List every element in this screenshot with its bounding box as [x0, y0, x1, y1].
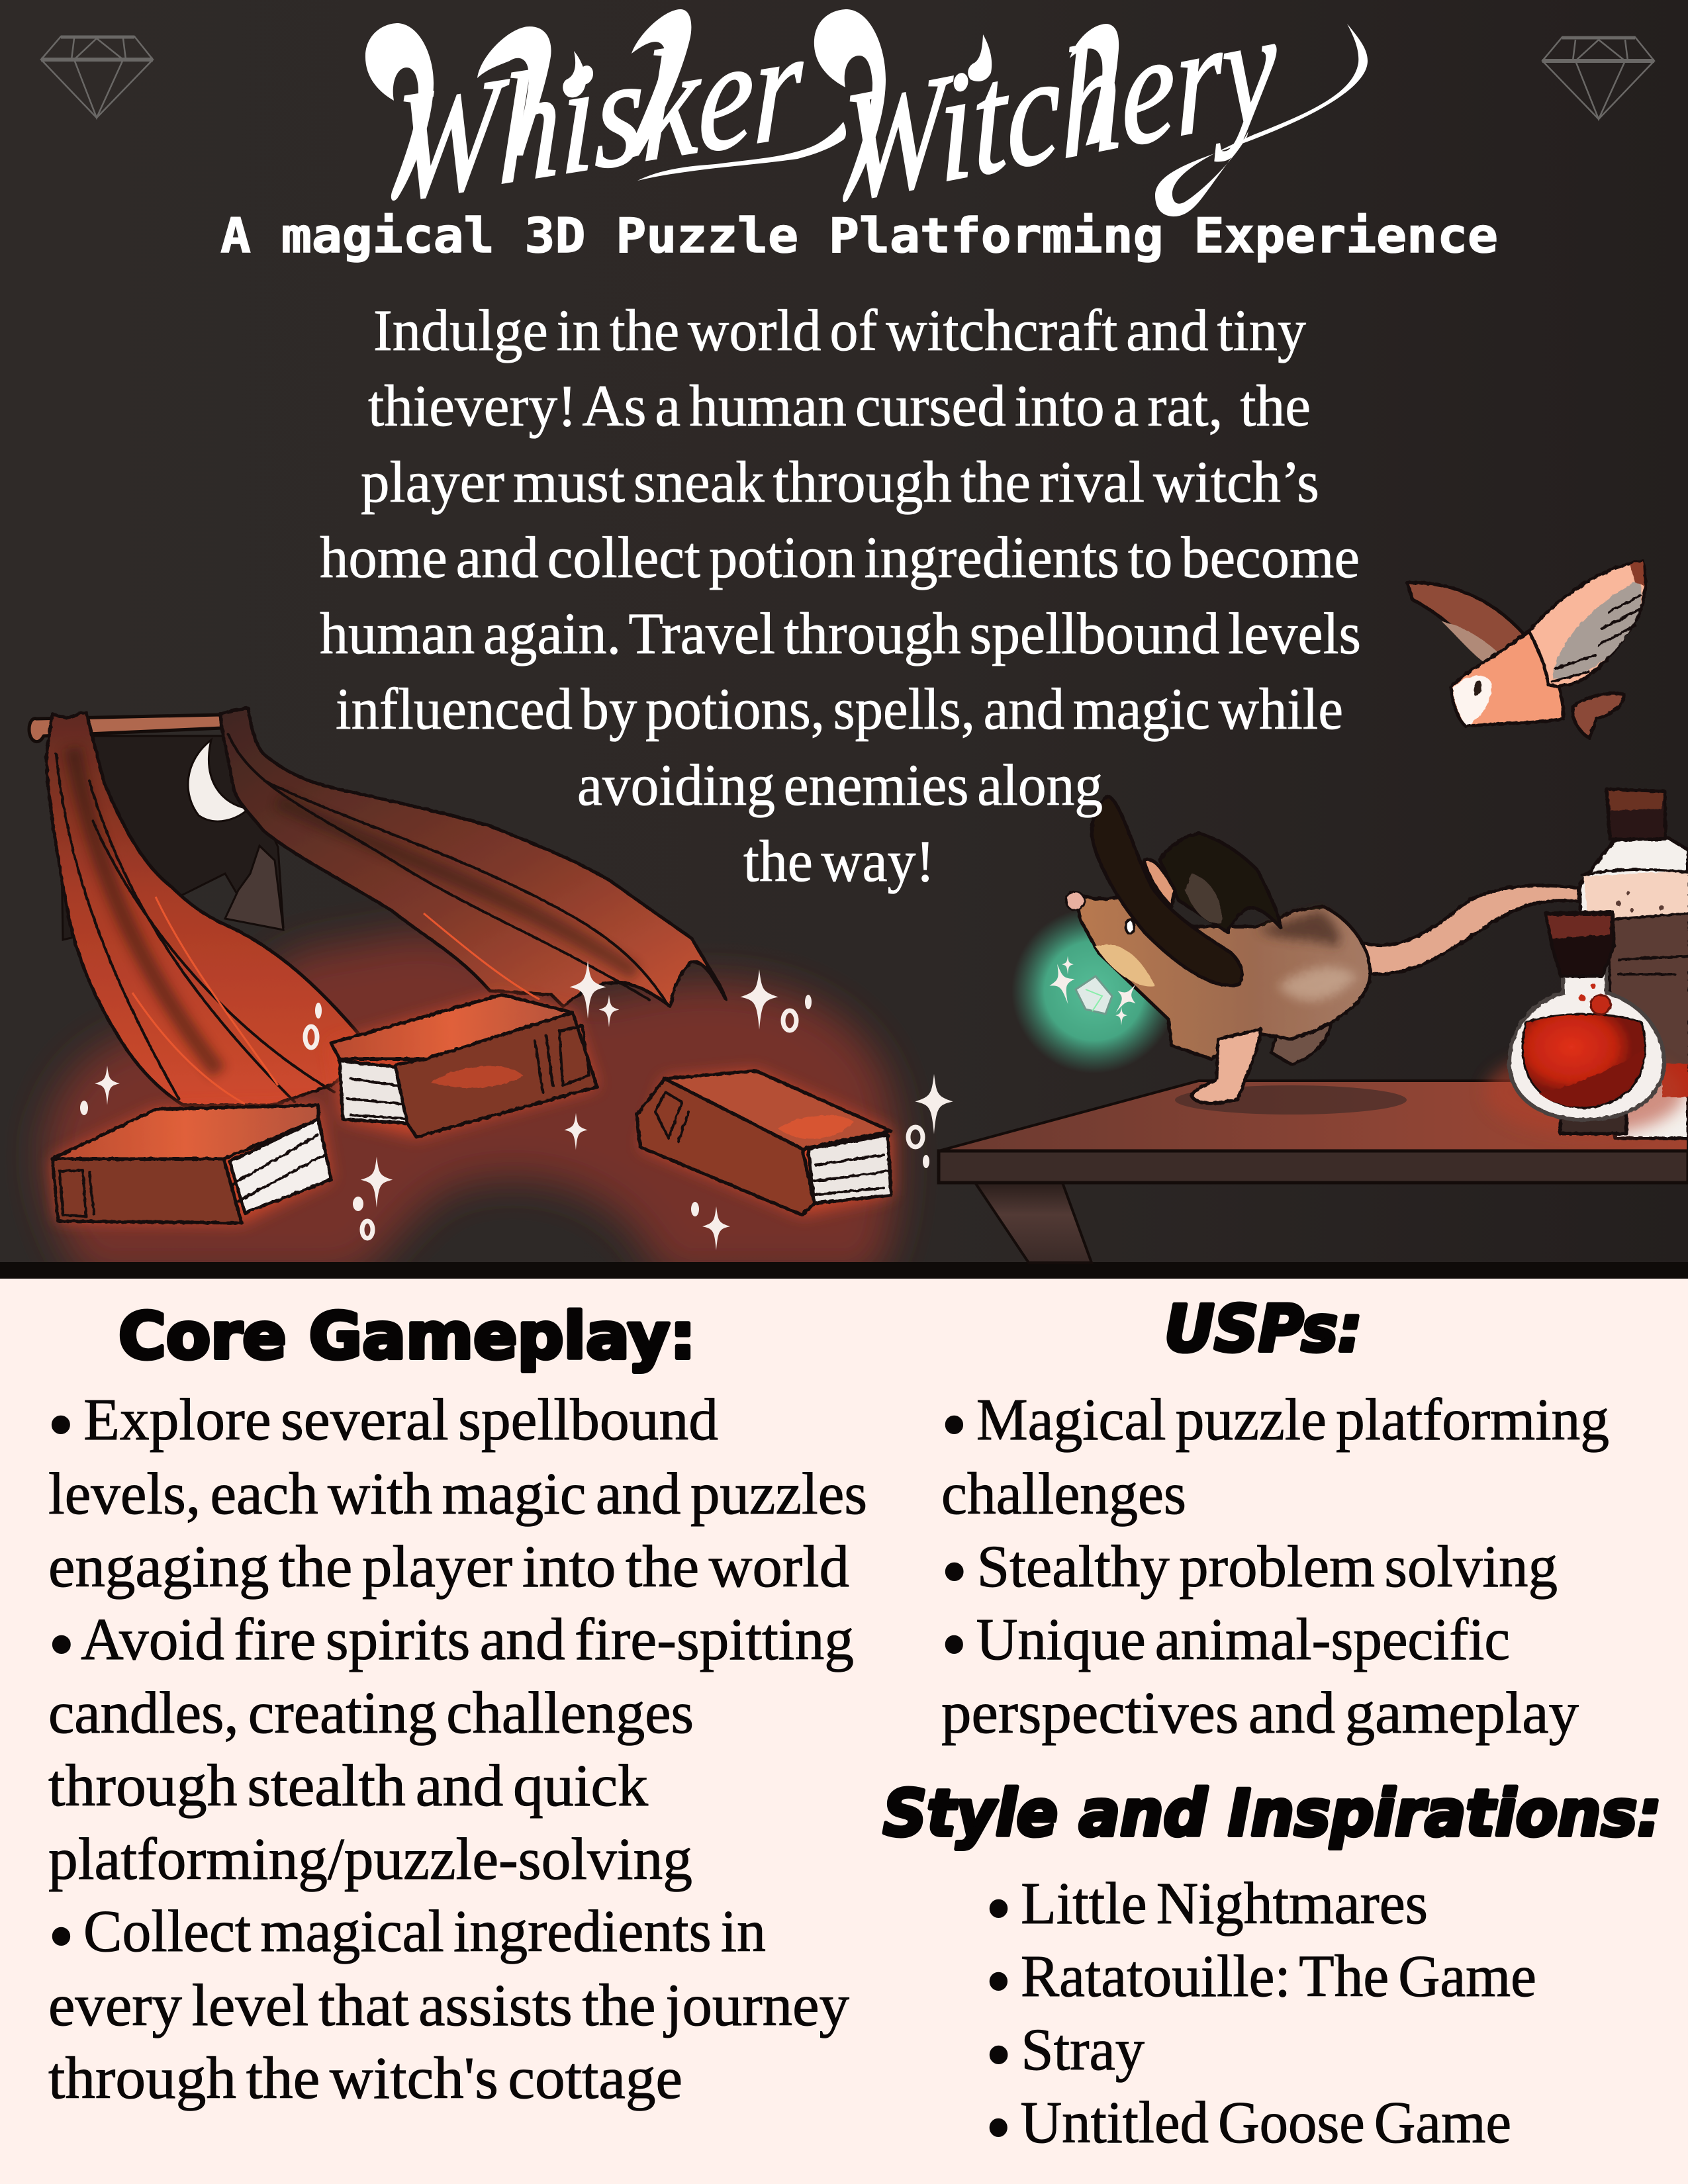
illustration: red glow behind books	[45, 933, 898, 1277]
rat fur highlight	[1278, 967, 1357, 1001]
text block: intro paragraph: Indulge in the world of witchcraft and tiny	[373, 298, 1306, 363]
illustration: front red potion flask	[1485, 912, 1684, 1135]
text block: inspirations list: •	[986, 2013, 1011, 2097]
text block: intro paragraph	[320, 298, 1361, 894]
text block: core gameplay bullets: •	[48, 1602, 75, 1686]
text block: USP bullets: Stealthy problem solving	[967, 1534, 1558, 1600]
gem	[1076, 976, 1112, 1014]
text block: core gameplay bullets: platforming/puzzle-solving	[48, 1827, 692, 1892]
text block: USP bullets: Magical puzzle platforming	[967, 1387, 1609, 1453]
right curtain fold shading	[278, 801, 635, 973]
panel: cream lower section	[0, 1279, 1688, 2184]
rat nose	[1066, 891, 1084, 910]
text block: USP bullets: •	[941, 1529, 967, 1614]
text block: USP bullets	[941, 1383, 1609, 1746]
illustration: curtains, window and moon	[29, 708, 726, 1105]
left curtain	[46, 712, 374, 1105]
illustration: book rim glow	[52, 995, 891, 1223]
text block: core gameplay bullets: Explore several spellbound	[74, 1387, 718, 1453]
owl face	[1453, 676, 1491, 725]
text block: intro paragraph: the way!	[743, 829, 935, 894]
gem sparkles	[1045, 956, 1145, 1025]
illustration: back potion bottle	[1580, 789, 1688, 1138]
panel: dark hero background	[0, 0, 1688, 1262]
window panel	[60, 736, 283, 940]
icon: right diamond outline	[1542, 37, 1654, 119]
rat ear	[1144, 859, 1175, 907]
text block: core gameplay bullets: through stealth and quick	[48, 1753, 648, 1819]
text block: inspirations list: Stray	[1011, 2017, 1145, 2083]
text block: USP bullets: challenges	[941, 1461, 1186, 1527]
text block: core gameplay bullets: every level that assists the journey	[48, 1973, 849, 2038]
text block: core gameplay bullets	[48, 1383, 867, 2111]
illustration: bottom-left book	[52, 1105, 331, 1223]
text block: core gameplay bullets: •	[48, 1894, 74, 1978]
text block: intro paragraph: influenced by potions, spells, and magic while	[336, 677, 1343, 742]
text block: intro paragraph: home and collect potion ingredients to become	[320, 525, 1360, 590]
icon: left diamond outline	[41, 36, 153, 118]
right curtain	[220, 708, 726, 1007]
text block: intro paragraph: human again. Travel through spellbound levels	[320, 602, 1361, 666]
text block: inspirations list: •	[986, 1939, 1011, 2023]
rat snout highlight	[1096, 945, 1155, 987]
text block: inspirations list: •	[986, 1866, 1011, 1950]
heading: USPs: USPs:	[1164, 1292, 1362, 1366]
text block: USP bullets: •	[941, 1383, 967, 1467]
text block: inspirations list: Ratatouille: The Game	[1011, 1944, 1536, 2009]
subtitle: A magical 3D Puzzle Platforming Experience	[220, 208, 1498, 263]
hat crown	[1160, 833, 1281, 933]
text block: inspirations list: •	[986, 2085, 1011, 2169]
owl tail	[1573, 694, 1624, 738]
rat back leg	[1271, 1016, 1331, 1064]
text block: core gameplay bullets: Collect magical ingredients in	[74, 1899, 766, 1964]
text block: intro paragraph: thievery! As a human cursed into a rat, the	[368, 374, 1311, 439]
text block: intro paragraph: avoiding enemies along	[577, 753, 1103, 818]
text block: USP bullets: perspectives and gameplay	[941, 1680, 1579, 1746]
rat front leg	[1192, 1029, 1261, 1103]
illustration: table	[939, 1081, 1688, 1263]
text block: core gameplay bullets: levels, each with magic and puzzles	[48, 1461, 867, 1527]
rat body	[1076, 893, 1370, 1059]
icon: glowing green gem	[1045, 956, 1145, 1025]
icon: green gem glow	[1011, 908, 1177, 1073]
illustration: witch rat	[1066, 796, 1579, 1103]
text block: USP bullets: •	[941, 1602, 967, 1686]
owl near wing	[1529, 561, 1645, 686]
moon crescent	[188, 740, 248, 821]
window corner ornament	[225, 846, 283, 930]
text block: USP bullets: Unique animal-specific	[967, 1607, 1510, 1672]
rat tail	[1364, 886, 1579, 974]
illustration: barn owl	[1407, 561, 1645, 738]
illustration: middle book	[331, 995, 597, 1137]
text block: inspirations list	[986, 1866, 1536, 2169]
text block: core gameplay bullets: through the witch's cottage	[48, 2046, 682, 2111]
rat eye	[1126, 919, 1134, 934]
illustration: right book	[637, 1071, 891, 1215]
curtain rod	[29, 715, 222, 742]
illustration: sparkles around books	[80, 961, 953, 1250]
heading: Core Gameplay: Core Gameplay:	[118, 1299, 696, 1373]
owl far wing	[1407, 583, 1524, 663]
text block: inspirations list: Untitled Goose Game	[1011, 2090, 1511, 2156]
title: Whisker Witchery logotype	[365, 0, 1368, 234]
text block: core gameplay bullets: Avoid fire spirits and fire-spitting	[75, 1607, 854, 1672]
rat back shading	[1258, 910, 1340, 946]
text block: core gameplay bullets: candles, creating challenges	[48, 1680, 694, 1746]
panel: dark divider band	[0, 1262, 1688, 1279]
text block: core gameplay bullets: •	[48, 1383, 74, 1467]
hat brim	[1092, 796, 1243, 985]
heading: Style and Inspirations: Style and Inspirations:	[883, 1776, 1662, 1850]
text block: intro paragraph: player must sneak through the rival witch’s	[361, 450, 1319, 515]
text block: inspirations list: Little Nightmares	[1011, 1871, 1428, 1936]
owl body	[1451, 631, 1563, 726]
text block: core gameplay bullets: engaging the player into the world	[48, 1534, 849, 1600]
left curtain fold shading	[73, 748, 218, 1072]
